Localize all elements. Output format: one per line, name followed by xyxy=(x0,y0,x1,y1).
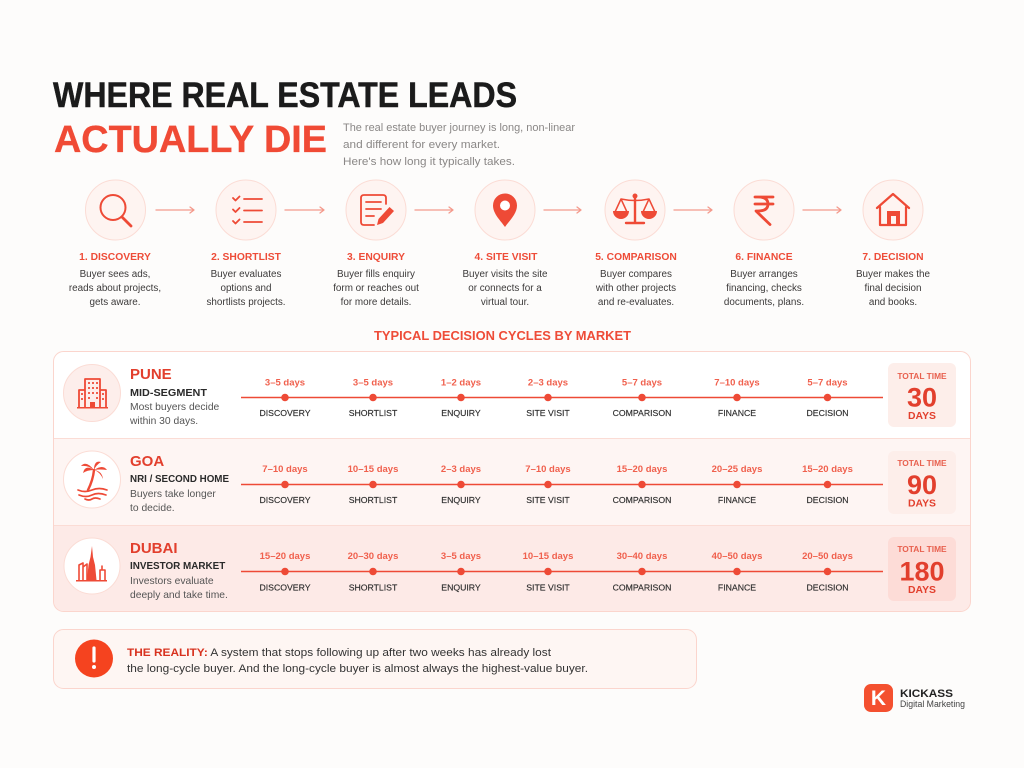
row: Dubai: Investors evaluate xyxy=(130,576,214,587)
timeline: Goa: DECISION xyxy=(806,495,848,505)
row: Pune xyxy=(64,363,956,427)
timeline: Goa: ENQUIRY xyxy=(441,495,481,505)
total: Pune: 30 xyxy=(907,382,937,412)
timeline: Pune: 5–7 days xyxy=(622,378,662,388)
timeline: Dubai: 3–5 days xyxy=(441,551,481,562)
arrow 5 xyxy=(674,207,712,213)
step 6: finance: Buyer arranges xyxy=(730,269,798,280)
row: Pune: PUNE xyxy=(130,366,172,383)
timeline: Dubai: 40–50 days xyxy=(712,551,762,562)
panel: market table xyxy=(54,352,970,612)
step 5: comparison: 5. COMPARISON xyxy=(595,252,677,263)
arrow 1 xyxy=(156,207,194,213)
step 5: comparison: Buyer compares xyxy=(600,269,672,280)
timeline: Dubai: SHORTLIST xyxy=(349,582,398,592)
total: Goa: DAYS xyxy=(908,498,936,510)
step 1: discovery: reads about projects, xyxy=(69,283,161,294)
timeline: Pune xyxy=(241,378,883,418)
row: Goa xyxy=(64,451,956,514)
timeline: Goa: SHORTLIST xyxy=(349,495,398,505)
callout text xyxy=(127,647,588,675)
logo: Kickass Digital Marketing: KICKASS xyxy=(900,688,953,700)
callout text: THE REALITY: A system that stops following up after two weeks has already lost xyxy=(127,647,552,659)
step 7: decision: Buyer makes the xyxy=(856,269,931,280)
timeline: Dubai: DECISION xyxy=(806,582,848,592)
timeline: Dubai: ENQUIRY xyxy=(441,582,481,592)
timeline: Dubai: SITE VISIT xyxy=(526,582,570,592)
icon: rupee xyxy=(734,180,794,240)
step 5: comparison: and re-evaluates. xyxy=(598,297,674,308)
arrow 6 xyxy=(803,207,841,213)
timeline: Dubai: DISCOVERY xyxy=(259,582,311,592)
callout: the reality xyxy=(54,630,696,688)
timeline: Goa: 15–20 days xyxy=(802,464,853,475)
title xyxy=(53,76,517,161)
step 4: site visit: Buyer visits the site xyxy=(462,269,548,280)
timeline: Pune: 3–5 days xyxy=(353,378,393,388)
step 2: shortlist: 2. SHORTLIST xyxy=(211,252,282,263)
icon: magnifier xyxy=(86,180,146,240)
step 2: shortlist: shortlists projects. xyxy=(206,297,286,308)
step 3: enquiry: 3. ENQUIRY xyxy=(347,252,405,263)
timeline: Pune: DISCOVERY xyxy=(259,408,311,418)
row: Dubai: DUBAI xyxy=(130,540,178,557)
step 6: finance: documents, plans. xyxy=(724,297,804,308)
timeline: Goa: 10–15 days xyxy=(348,464,398,475)
intro text: Here's how long it typically takes. xyxy=(343,156,515,168)
timeline: Pune: ENQUIRY xyxy=(441,408,481,418)
logo: Kickass Digital Marketing xyxy=(864,684,965,712)
section heading: TYPICAL DECISION CYCLES BY MARKET xyxy=(374,329,631,343)
timeline: Pune: SHORTLIST xyxy=(349,408,398,418)
total: Pune: DAYS xyxy=(908,411,936,422)
timeline: Dubai: 30–40 days xyxy=(617,551,667,562)
timeline: Dubai xyxy=(241,551,883,592)
timeline: Goa: DISCOVERY xyxy=(259,495,311,505)
total: Goa: TOTAL TIME xyxy=(897,458,947,468)
title: ACTUALLY DIE xyxy=(54,119,327,161)
timeline: Goa: COMPARISON xyxy=(613,495,671,505)
step 2: shortlist: options and xyxy=(220,283,272,294)
row: Goa: NRI / SECOND HOME xyxy=(130,474,229,485)
step 5: comparison: with other projects xyxy=(595,283,676,294)
total: Dubai: TOTAL TIME xyxy=(897,544,947,554)
logo: Kickass Digital Marketing: K xyxy=(871,687,886,710)
arrow 4 xyxy=(544,207,581,213)
step 5: comparison xyxy=(595,180,677,308)
row: Pune: MID-SEGMENT xyxy=(130,388,207,399)
total: Dubai: 180 xyxy=(899,556,945,586)
timeline: Dubai: 10–15 days xyxy=(523,551,573,562)
timeline: Goa: 15–20 days xyxy=(617,464,667,475)
total: Pune: TOTAL TIME xyxy=(897,371,947,381)
step 7: decision xyxy=(856,180,931,308)
icon: office buildings xyxy=(64,364,120,422)
step 1: discovery: Buyer sees ads, xyxy=(80,269,150,280)
row: Dubai xyxy=(64,537,956,601)
step 2: shortlist: Buyer evaluates xyxy=(211,269,281,280)
step 6: finance xyxy=(724,180,804,308)
row: Dubai: deeply and take time. xyxy=(130,590,228,601)
step 4: site visit: virtual tour. xyxy=(481,297,529,308)
timeline: Pune: 7–10 days xyxy=(714,378,760,388)
intro text: The real estate buyer journey is long, non-linear xyxy=(343,122,575,134)
timeline: Goa: 7–10 days xyxy=(262,464,308,475)
total: Dubai: DAYS xyxy=(908,585,936,596)
timeline: Goa: FINANCE xyxy=(718,495,756,505)
step 4: site visit: or connects for a xyxy=(468,283,542,294)
intro text xyxy=(343,122,575,168)
callout text: the long-cycle buyer. And the long-cycle buyer is almost always the highest-value buyer. xyxy=(127,663,588,675)
step 7: decision: 7. DECISION xyxy=(862,252,924,263)
icon: form with pencil xyxy=(346,180,406,240)
row: Pune: Most buyers decide xyxy=(130,402,220,413)
title: WHERE REAL ESTATE LEADS xyxy=(53,76,517,115)
step 3: enquiry: form or reaches out xyxy=(333,283,419,294)
step 1: discovery: gets aware. xyxy=(89,297,141,308)
icon: house xyxy=(863,180,923,240)
timeline: Pune: FINANCE xyxy=(718,408,756,418)
row: Goa: Buyers take longer xyxy=(130,489,216,500)
timeline: Goa: 20–25 days xyxy=(712,464,762,475)
timeline: Dubai: 15–20 days xyxy=(260,551,310,562)
step 6: finance: 6. FINANCE xyxy=(735,252,793,263)
icon: palm and waves xyxy=(64,451,120,508)
icon: alert xyxy=(75,640,113,678)
timeline: Pune: 5–7 days xyxy=(807,378,848,388)
step 3: enquiry: for more details. xyxy=(341,297,411,308)
step 4: site visit xyxy=(462,180,548,308)
step 7: decision: final decision xyxy=(864,283,922,294)
icon: map pin xyxy=(475,180,535,240)
step 7: decision: and books. xyxy=(869,297,917,308)
logo: Kickass Digital Marketing: Digital Marketing xyxy=(900,699,965,709)
timeline: Pune: 2–3 days xyxy=(528,378,568,388)
row: Goa: to decide. xyxy=(130,503,175,514)
timeline: Pune: 3–5 days xyxy=(265,378,305,388)
icon: Dubai skyline xyxy=(64,538,120,594)
timeline: Pune: 1–2 days xyxy=(441,378,481,388)
step 1: discovery xyxy=(69,180,161,308)
timeline: Goa: SITE VISIT xyxy=(526,495,570,505)
timeline: Dubai: 20–30 days xyxy=(348,551,398,562)
timeline: Goa xyxy=(241,464,883,505)
step 3: enquiry xyxy=(333,180,419,308)
arrow 2 xyxy=(285,207,324,213)
timeline: Goa: 7–10 days xyxy=(525,464,571,475)
timeline: Dubai: 20–50 days xyxy=(802,551,853,562)
step 3: enquiry: Buyer fills enquiry xyxy=(337,269,415,280)
timeline: Goa: 2–3 days xyxy=(441,464,481,475)
timeline: Pune: SITE VISIT xyxy=(526,408,570,418)
arrow 3 xyxy=(415,207,453,213)
timeline: Dubai: FINANCE xyxy=(718,582,756,592)
total: Pune xyxy=(888,363,956,427)
total: Goa: 90 xyxy=(907,470,937,500)
step 1: discovery: 1. DISCOVERY xyxy=(79,252,151,263)
step 4: site visit: 4. SITE VISIT xyxy=(475,252,538,263)
intro text: and different for every market. xyxy=(343,139,500,151)
icon: checklist xyxy=(216,180,276,240)
step 2: shortlist xyxy=(206,180,286,308)
total: Dubai xyxy=(888,537,956,601)
timeline: Pune: COMPARISON xyxy=(613,408,671,418)
total: Goa xyxy=(888,451,956,514)
timeline: Dubai: COMPARISON xyxy=(613,582,671,592)
row: Pune: within 30 days. xyxy=(129,416,198,427)
row: Dubai: INVESTOR MARKET xyxy=(130,561,225,572)
step 6: finance: financing, checks xyxy=(726,283,802,294)
icon: balance scale xyxy=(605,180,665,240)
timeline: Pune: DECISION xyxy=(806,408,848,418)
row: Goa: GOA xyxy=(130,453,164,470)
